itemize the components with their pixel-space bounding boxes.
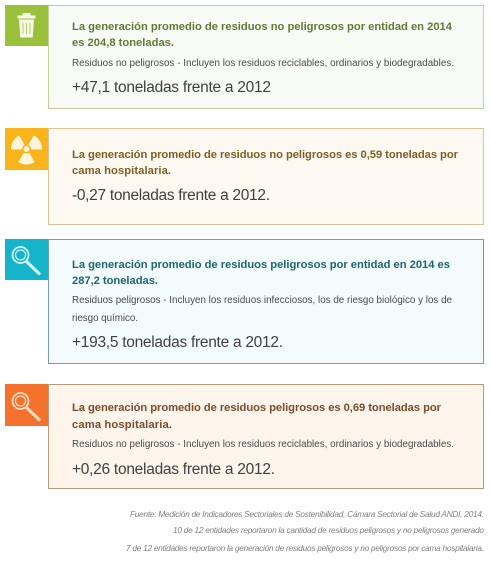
source notes: 7 de 12 entidades reportaron la generación de residuos peligrosos y no peligrosos por cama hospitalaria. xyxy=(126,543,484,553)
source notes: 10 de 12 entidades reportaron la cantidad de residuos peligrosos y no peligrosos generado xyxy=(173,525,484,535)
heading xyxy=(72,259,450,287)
heading: La generación promedio de residuos peligrosos por entidad en 2014 es xyxy=(72,259,450,271)
change figure: +193,5 toneladas frente a 2012. xyxy=(72,334,283,351)
panel background xyxy=(48,6,484,108)
panel: residuos no peligrosos por cama xyxy=(5,128,484,224)
heading: es 204,8 toneladas. xyxy=(72,37,174,49)
heading: La generación promedio de residuos no peligrosos por entidad en 2014 xyxy=(72,21,453,33)
heading xyxy=(72,149,459,177)
heading: 287,2 toneladas. xyxy=(72,275,158,287)
panel: residuos peligrosos por entidad xyxy=(5,239,484,364)
icon: trash can xyxy=(5,5,48,46)
source notes xyxy=(126,509,484,553)
icon: magnifier xyxy=(5,239,48,280)
panel: residuos no peligrosos por entidad xyxy=(5,5,484,108)
panel: residuos peligrosos por cama xyxy=(5,384,484,488)
heading: cama hospitalaria. xyxy=(72,165,171,177)
definition: riesgo químico. xyxy=(72,313,138,324)
heading: cama hospitalaria. xyxy=(72,419,172,431)
panel background xyxy=(48,384,484,488)
change figure: +47,1 toneladas frente a 2012 xyxy=(72,79,271,96)
change figure: -0,27 toneladas frente a 2012. xyxy=(72,187,270,204)
definition xyxy=(72,295,453,324)
change figure: +0,26 toneladas frente a 2012. xyxy=(72,461,275,478)
heading: La generación promedio de residuos no peligrosos es 0,59 toneladas por xyxy=(72,149,459,161)
definition: Residuos no peligrosos - Incluyen los residuos reciclables, ordinarios y biodegradables. xyxy=(72,439,454,450)
definition: Residuos peligrosos - Incluyen los residuos infecciosos, los de riesgo biológico y los de xyxy=(72,295,453,306)
heading xyxy=(72,21,453,49)
icon: radiation xyxy=(5,128,48,170)
panel background xyxy=(48,128,484,224)
heading xyxy=(72,402,442,431)
panel background xyxy=(48,240,484,364)
heading: La generación promedio de residuos peligrosos es 0,69 toneladas por xyxy=(72,402,442,414)
icon: magnifier xyxy=(5,384,48,426)
source notes: Fuente: Medición de Indicadores Sectoriales de Sostenibilidad, Cámara Sectorial de Salud ANDI, 2014. xyxy=(130,509,484,519)
definition: Residuos no peligrosos - Incluyen los residuos reciclables, ordinarios y biodegradables. xyxy=(72,58,454,69)
